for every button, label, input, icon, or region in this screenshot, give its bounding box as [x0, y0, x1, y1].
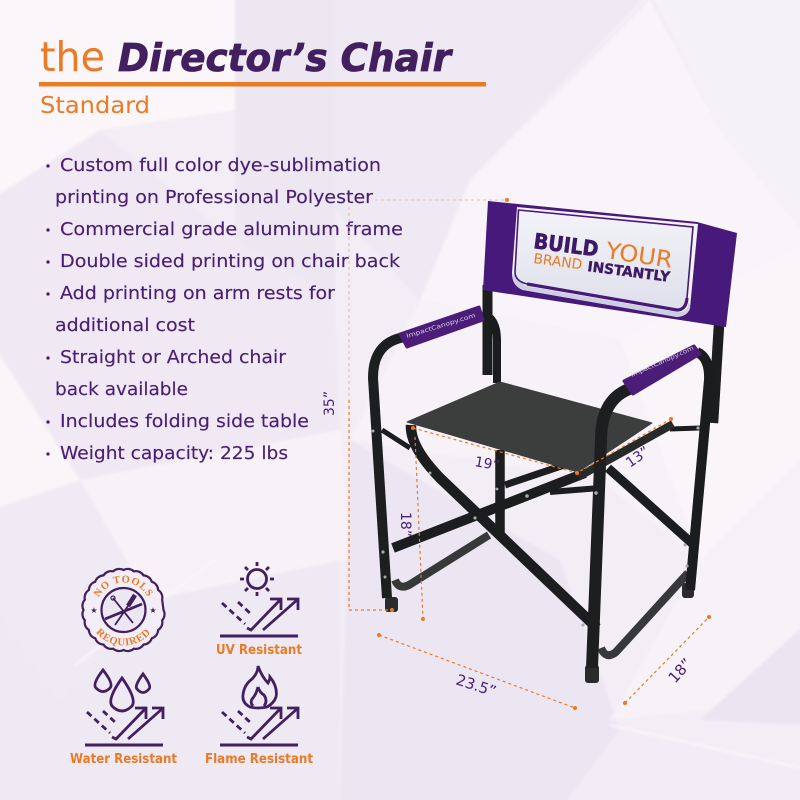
title: Director’s Chair: [118, 36, 453, 80]
panel text: YOUR: [603, 238, 674, 274]
feature list: additional cost: [55, 315, 195, 336]
crossed tools icon: [105, 595, 142, 625]
feature list: [46, 155, 403, 464]
dimension labels: 18”: [665, 655, 696, 687]
dimension labels: 35”: [322, 391, 338, 416]
badge stars: [90, 606, 157, 615]
badge text: REQUIRED: [96, 628, 150, 646]
dimension labels: 13”: [623, 444, 653, 471]
chair foot caps: [385, 583, 694, 683]
subtitle: Standard: [40, 93, 150, 119]
feature list: back available: [55, 379, 188, 400]
icon: water resistant: [85, 670, 163, 745]
feature list: printing on Professional Polyester: [55, 187, 374, 208]
feature list: Commercial grade aluminum frame: [60, 219, 403, 240]
title: the: [40, 33, 105, 81]
chair front legs and arms: [373, 337, 405, 598]
badge text: NO TOOLS: [93, 576, 153, 598]
right arm pad: ImpactCanopy.com: [630, 345, 695, 379]
panel text: BUILD: [532, 229, 600, 261]
badge stars: ★: [90, 606, 98, 615]
panel text: INSTANTLY: [586, 259, 672, 286]
feature list: Weight capacity: 225 lbs: [60, 443, 288, 464]
feature list: Double sided printing on chair back: [60, 251, 401, 272]
dimension labels: 23.5”: [454, 671, 498, 701]
dimension labels: 18”: [397, 512, 413, 537]
left arm pad: ImpactCanopy.com: [406, 312, 477, 340]
chair rear frame: [382, 285, 719, 655]
chair: [372, 201, 737, 683]
label: water resistant: Water Resistant: [70, 752, 177, 767]
badge stars: ★: [149, 606, 157, 615]
panel text: BRAND: [532, 251, 583, 273]
chair screws: [372, 426, 700, 627]
chair seat: [407, 382, 652, 472]
right arm pad: [624, 345, 700, 394]
label: uv resistant: UV Resistant: [216, 643, 302, 658]
left arm pad: [400, 307, 483, 347]
dimension labels: [322, 391, 696, 701]
feature list: Custom full color dye-sublimation: [60, 155, 381, 176]
title rule: [39, 82, 486, 86]
icon: flame resistant: [220, 666, 298, 745]
badge text: [93, 576, 153, 646]
icon: uv resistant: [220, 562, 298, 636]
badge: no tools required: [81, 568, 166, 652]
feature list: Includes folding side table: [60, 411, 309, 432]
printed panel: [512, 207, 698, 317]
dimension dots: [377, 198, 711, 710]
dimension lines: [349, 200, 709, 708]
feature list: Straight or Arched chair: [60, 347, 287, 368]
label: flame resistant: Flame Resistant: [205, 752, 313, 767]
panel text: [532, 229, 674, 286]
chair back banner: [483, 201, 737, 327]
feature list: Add printing on arm rests for: [60, 283, 336, 304]
chair rear arm tubes: [482, 313, 497, 383]
dimension labels: 19”: [473, 454, 501, 474]
chair seat rail: [578, 424, 673, 477]
